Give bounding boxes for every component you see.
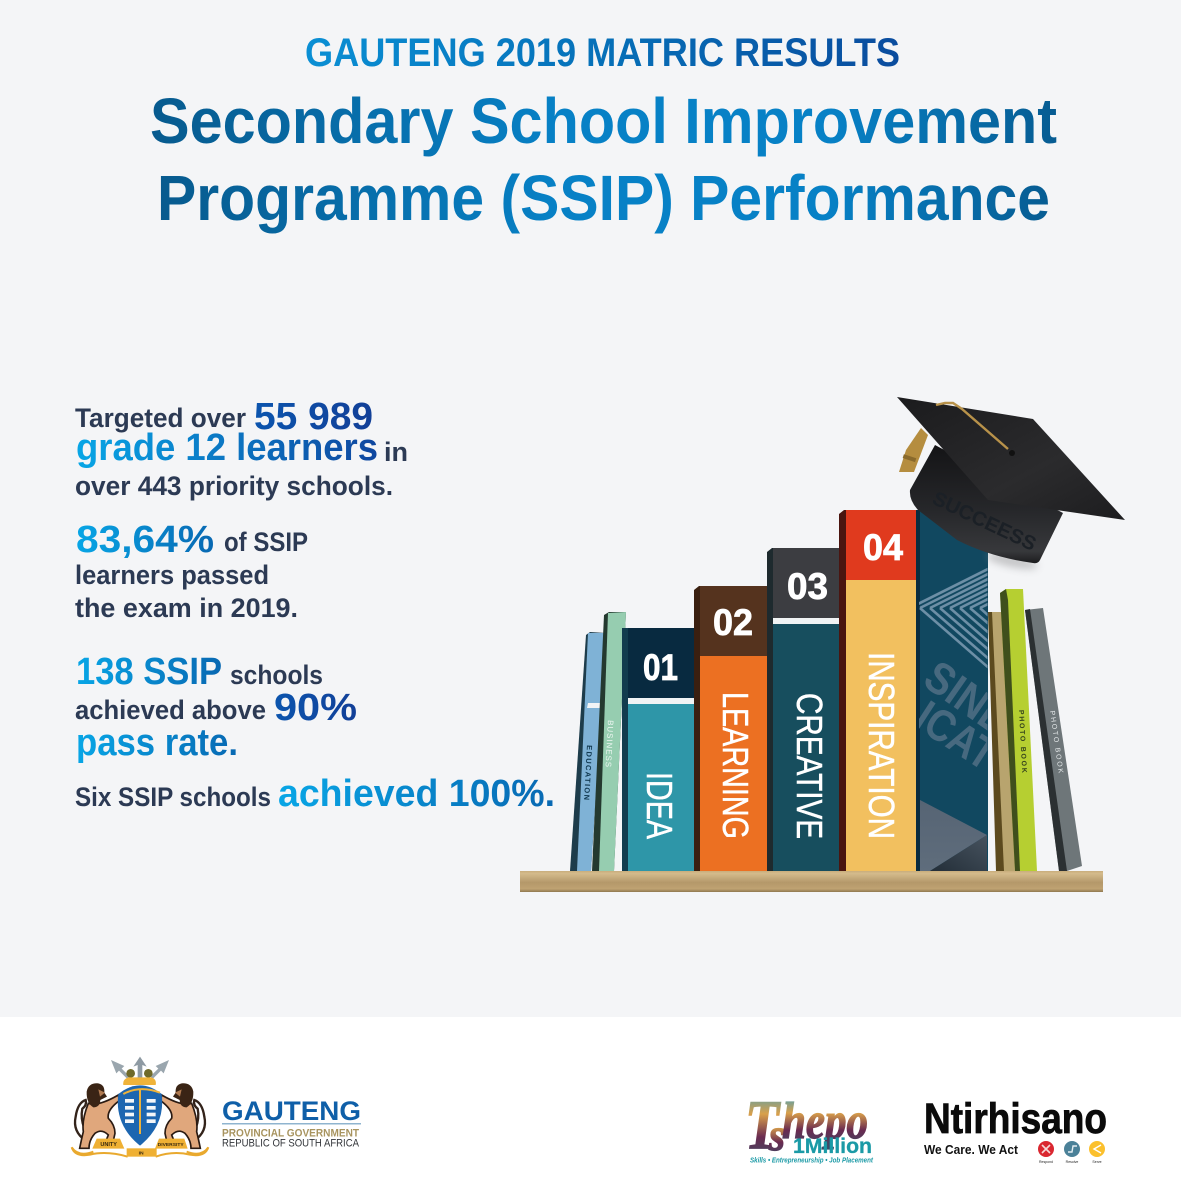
stat: schools above 90%: 90% — [274, 687, 357, 729]
stat: schools above 90%: schools — [230, 660, 323, 690]
icon: graduation cap — [897, 397, 1125, 572]
book: 01 idea: IDEA — [639, 772, 680, 839]
icon: resolve — [1064, 1141, 1080, 1164]
book: education — [570, 632, 606, 871]
book: business education cover — [916, 510, 988, 871]
crest ribbon: DIVERSITY — [158, 1142, 184, 1148]
book: green photo book — [1000, 589, 1037, 871]
stat: schools above 90%: 138 SSIP — [76, 651, 222, 693]
logo: tshepo 1 million: T — [745, 1087, 782, 1164]
logo: ntirhisano: Ntirhisano — [924, 1095, 1107, 1143]
stat: targeted learners: over 443 priority schools. — [75, 471, 393, 501]
logo: tshepo 1 million: s — [768, 1109, 785, 1160]
book: green photo book: PHOTO BOOK — [1017, 710, 1027, 773]
title: line two: Programme (SSIP) Performance — [157, 162, 1050, 234]
book: business: BUSINESS — [604, 720, 615, 767]
shelf — [520, 871, 1103, 892]
title: kicker: GAUTENG 2019 MATRIC RESULTS — [305, 31, 900, 75]
logo: gauteng crest — [72, 1057, 208, 1157]
book: 04 inspiration: INSPIRATION — [861, 652, 902, 839]
stat: targeted learners: in — [384, 437, 408, 467]
logo: gauteng wordmark: GAUTENG — [222, 1096, 361, 1126]
crest ribbon: IN — [139, 1151, 144, 1157]
cap cord — [936, 403, 1008, 449]
text block: statistics — [75, 396, 555, 815]
stat: pass percentage: of SSIP — [224, 527, 308, 557]
book: 01 idea — [622, 628, 697, 871]
crest lions — [75, 1083, 205, 1148]
logo: ntirhisano — [924, 1095, 1107, 1164]
stat: schools at 100%: achieved 100%. — [278, 773, 555, 815]
book: grey photo book: PHOTO BOOK — [1048, 710, 1064, 774]
icon: respond — [1038, 1141, 1054, 1164]
logo: tshepo 1 million: hepo — [782, 1093, 868, 1150]
icon: serve: Serve — [1092, 1160, 1102, 1164]
logo: gauteng wordmark — [222, 1096, 361, 1150]
stat: schools above 90%: pass rate. — [76, 722, 238, 764]
book: 02 learning — [694, 586, 770, 871]
stat: schools at 100%: Six SSIP schools — [75, 782, 271, 812]
right lion — [161, 1083, 205, 1148]
book: 02 learning: LEARNING — [715, 692, 756, 839]
book: business education cover: SINE — [915, 650, 1020, 745]
book: business — [592, 612, 626, 871]
logo: tshepo 1 million — [745, 1087, 874, 1164]
icon: respond: Respond — [1039, 1160, 1053, 1164]
stat: targeted learners: grade 12 learners — [76, 427, 378, 469]
logo: tshepo 1 million: 1Million — [793, 1135, 872, 1158]
title — [150, 31, 1057, 234]
book: 01 idea: 01 — [643, 647, 678, 688]
book: business education cover: ICAT — [907, 691, 1006, 780]
logo: ntirhisano: We Care. We Act — [924, 1143, 1019, 1157]
stat: pass percentage: 83,64% — [76, 519, 214, 561]
stat: schools above 90% — [75, 651, 357, 764]
logo: gauteng wordmark: PROVINCIAL GOVERNMENT — [222, 1128, 359, 1140]
crest spears — [111, 1057, 169, 1079]
stat: targeted learners: Targeted over — [75, 403, 246, 433]
cap body — [910, 445, 1063, 563]
book: 03 creative: 03 — [787, 566, 828, 607]
stat: targeted learners: 55 989 — [254, 396, 373, 438]
stat: schools at 100% — [75, 773, 555, 815]
icon: resolve: Resolve — [1066, 1160, 1078, 1164]
book: grey photo book — [1025, 608, 1082, 871]
book: education: EDUCATION — [582, 745, 594, 800]
book: 03 creative — [767, 548, 843, 871]
footer — [72, 1057, 1107, 1164]
stat: pass percentage: learners passed — [75, 560, 269, 590]
crest ribbon: UNITY — [100, 1142, 117, 1148]
book: tan — [988, 612, 1015, 871]
stat: targeted learners — [75, 396, 408, 501]
crest shield — [118, 1085, 162, 1146]
crest crown — [123, 1069, 156, 1085]
cap tassel — [899, 428, 928, 472]
cap body: SUCCEESS — [929, 488, 1039, 556]
illustration: books on shelf — [520, 510, 1103, 892]
book: 03 creative: CREATIVE — [789, 693, 830, 839]
stat: schools above 90%: achieved above — [75, 695, 266, 725]
left lion — [75, 1083, 119, 1148]
crest ribbon — [72, 1139, 208, 1157]
icon: serve — [1089, 1141, 1105, 1164]
logo: tshepo 1 million: Skills • Entrepreneurship • Job Placement — [750, 1158, 874, 1164]
book: 02 learning: 02 — [713, 602, 753, 643]
book: 04 inspiration — [839, 510, 916, 871]
logo: gauteng wordmark: REPUBLIC OF SOUTH AFRICA — [222, 1138, 360, 1150]
stat: pass percentage: the exam in 2019. — [75, 593, 298, 623]
book: 04 inspiration: 04 — [863, 527, 903, 568]
stat: pass percentage — [75, 519, 308, 623]
cap board — [897, 397, 1125, 520]
title: line one: Secondary School Improvement — [150, 85, 1057, 157]
